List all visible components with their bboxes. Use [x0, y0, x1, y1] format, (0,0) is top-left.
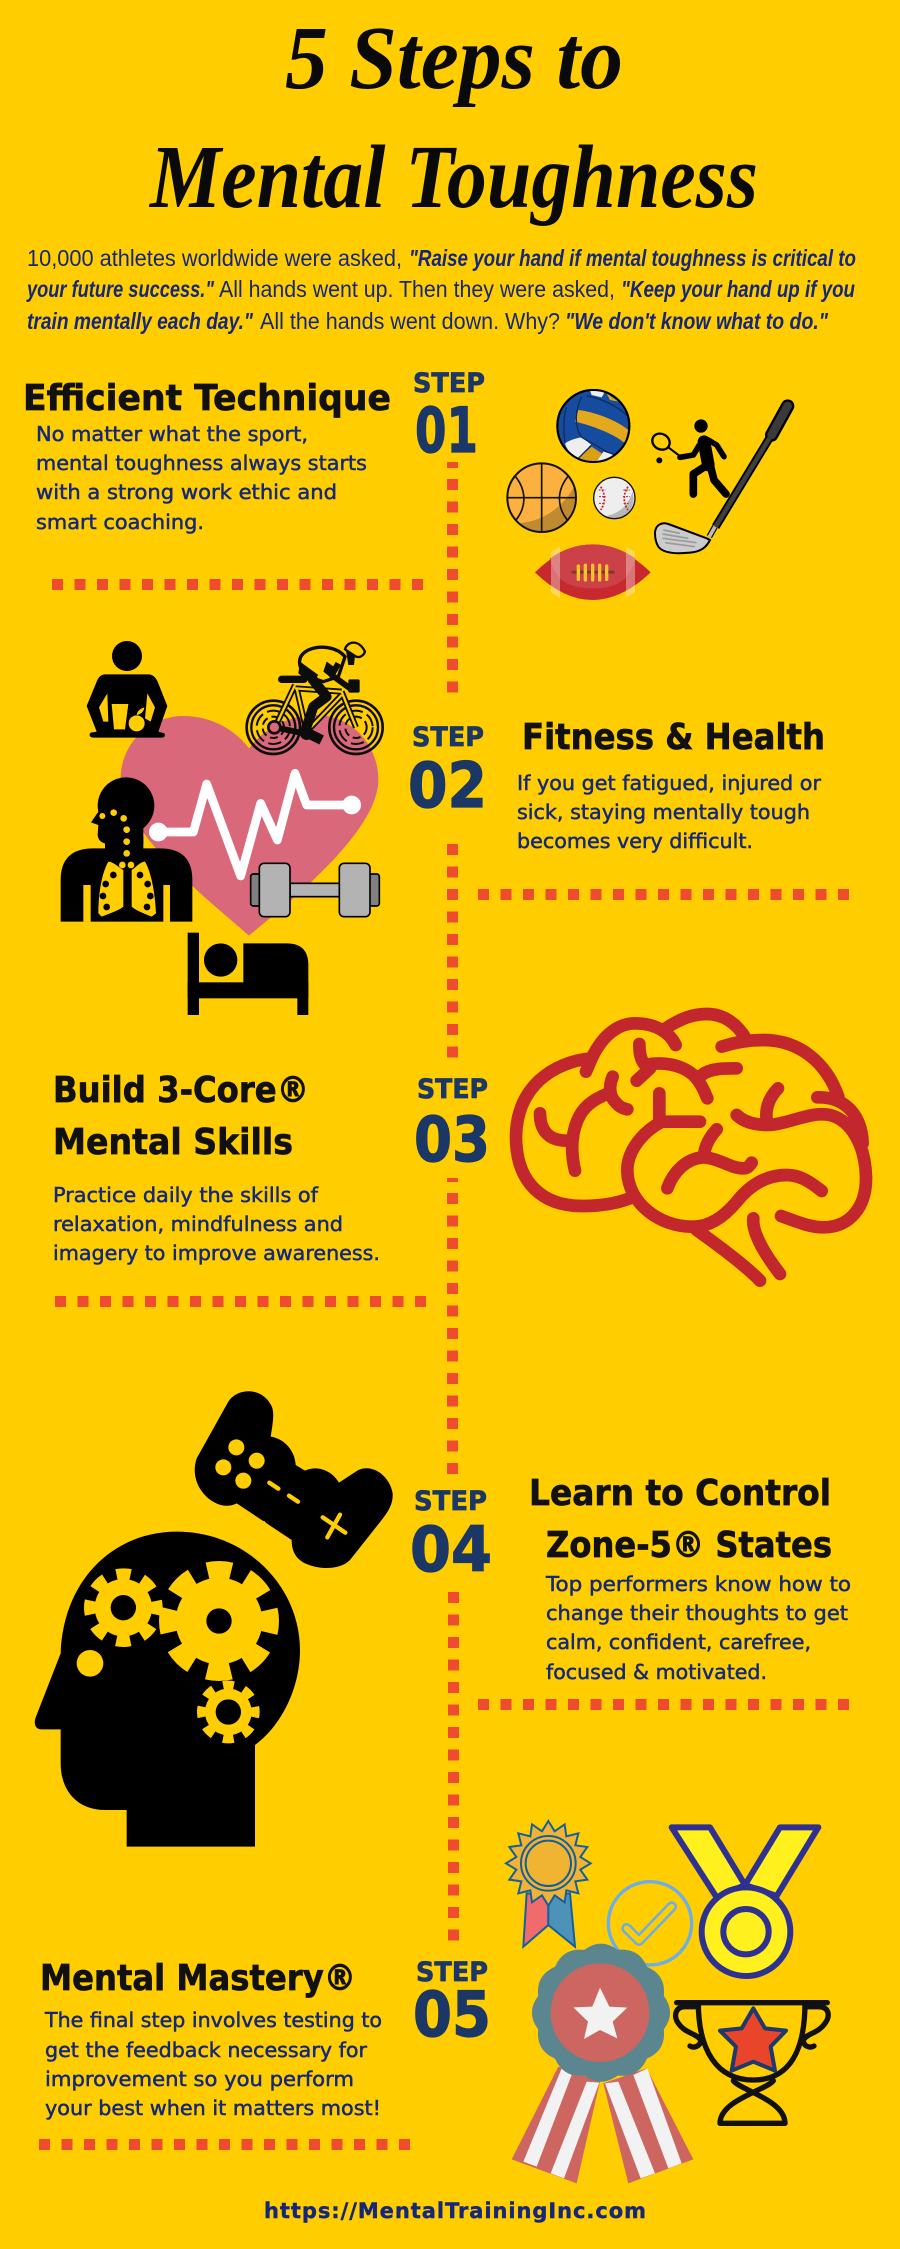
body: step 2: [517, 771, 822, 853]
body: step 4: [545, 1572, 851, 1684]
icon: brain: [516, 1014, 866, 1281]
icon: cyclist: [247, 643, 383, 754]
icon: volleyball: [557, 390, 629, 462]
intro text: All hands went up. Then they were asked,: [219, 276, 615, 302]
intro text: "Keep your hand up if you: [621, 276, 855, 302]
step 03 label: 03: [414, 1103, 490, 1176]
body: step 5: improvement so you perform: [45, 2067, 354, 2091]
step 04 label: 04: [410, 1513, 492, 1586]
heading: Learn to Control Zone-5 States: Learn to Control: [529, 1473, 831, 1514]
body: step 5: get the feedback necessary for: [45, 2038, 368, 2062]
icon: american football: [535, 544, 651, 600]
step 01 label: 01: [415, 394, 478, 467]
icon: game controller: [195, 1391, 393, 1568]
body: step 1: mental toughness always starts: [36, 451, 367, 475]
body: step 2: becomes very difficult.: [517, 829, 753, 853]
step 02 label: STEP: [412, 722, 484, 753]
body: step 4: calm, confident, carefree,: [546, 1630, 811, 1654]
intro text: 10,000 athletes worldwide were asked,: [27, 245, 402, 271]
icon: tennis player: [649, 419, 726, 494]
icon: dumbbell: [251, 863, 379, 917]
heading: Learn to Control Zone-5 States: [529, 1473, 832, 1566]
step 05 label: 05: [413, 1978, 491, 2051]
step 03 label: STEP: [417, 1074, 488, 1105]
icon: large gear: [169, 1571, 269, 1671]
body: step 1: smart coaching.: [36, 510, 204, 534]
step 01 label: STEP: [413, 368, 485, 399]
step 05 label: STEP: [416, 1957, 488, 1988]
intro text: "We don't know what to do.": [565, 308, 829, 334]
icon: check mark circle: [608, 1882, 692, 1965]
heading: Fitness and Health: Fitness & Health: [522, 717, 825, 758]
heading: Build 3-Core Mental Skills: [53, 1070, 309, 1163]
step 03 label: [414, 1074, 490, 1176]
intro text: [26, 245, 856, 334]
icon: head silhouette: [35, 1532, 300, 1847]
title: Mental Toughness: [148, 128, 758, 227]
heading: Learn to Control Zone-5 States: Zone-5® States: [546, 1525, 832, 1566]
intro text: All the hands went down. Why?: [260, 308, 560, 334]
intro text: your future success.": [26, 276, 215, 302]
body: step 4: change their thoughts to get: [546, 1601, 848, 1625]
icon: heart: [121, 715, 378, 936]
step 04 label: STEP: [414, 1486, 487, 1517]
body: step 2: If you get fatigued, injured or: [517, 771, 822, 795]
step 01 label: [413, 368, 485, 467]
panel: step 3 text: [53, 1070, 380, 1265]
icon: person sleeping in bed: [188, 933, 308, 1015]
heading: Efficient Technique: Efficient Technique: [23, 378, 391, 419]
icon: basketball: [507, 463, 576, 532]
icon: heartbeat line: [149, 773, 361, 876]
panel: step 4 text: [529, 1473, 851, 1684]
icon: person eating healthy food: [87, 641, 167, 738]
body: step 3: imagery to improve awareness.: [53, 1241, 380, 1265]
icon: dot: [77, 1650, 103, 1677]
icons: sports equipment: [507, 390, 788, 600]
icon: baseball: [594, 477, 635, 519]
icon: lungs and airways: [61, 777, 192, 922]
icon: controller cord: [237, 1522, 272, 1549]
icon: yellow medal: [672, 1827, 818, 1976]
website link: https://MentalTrainingInc.com: [264, 2199, 646, 2223]
icons: head with gears and game controller: [35, 1391, 393, 1847]
body: step 2: sick, staying mentally tough: [517, 800, 810, 824]
body: step 4: focused & motivated.: [546, 1660, 767, 1684]
body: step 3: relaxation, mindfulness and: [53, 1212, 343, 1236]
body: step 5: The final step involves testing to: [44, 2008, 382, 2032]
icon: golf club: [655, 406, 788, 553]
icon: small gear: [202, 1685, 255, 1739]
step 02 label: 02: [408, 749, 487, 822]
body: step 3: [53, 1183, 380, 1265]
panel: step 5 text: [40, 1958, 382, 2120]
title: 5 Steps to: [285, 9, 623, 108]
icon: small rosette: [506, 1821, 591, 1947]
panel: step 1 text: [23, 378, 391, 534]
body: step 1: [36, 422, 367, 534]
body: step 5: your best when it matters most!: [45, 2096, 381, 2120]
title: [148, 9, 758, 227]
body: step 3: Practice daily the skills of: [53, 1183, 319, 1207]
icons: fitness and health: [61, 641, 383, 1015]
icon: left gear: [90, 1574, 157, 1641]
step 02 label: [408, 722, 487, 822]
icon: large rosette with star: [512, 1944, 693, 2183]
body: step 1: with a strong work ethic and: [36, 480, 337, 504]
heading: Build 3-Core Mental Skills: Mental Skills: [53, 1122, 293, 1163]
heading: Mental Mastery: Mental Mastery®: [40, 1958, 356, 1999]
icons: medals and trophy: [506, 1821, 828, 2183]
icon: trophy with star: [676, 2003, 828, 2123]
heading: Build 3-Core Mental Skills: Build 3-Core®: [53, 1070, 309, 1111]
intro text: train mentally each day.": [27, 308, 254, 334]
body: step 1: No matter what the sport,: [36, 422, 308, 446]
body: step 5: [44, 2008, 382, 2120]
body: step 4: Top performers know how to: [545, 1572, 851, 1596]
panel: step 2 text: [517, 717, 825, 853]
